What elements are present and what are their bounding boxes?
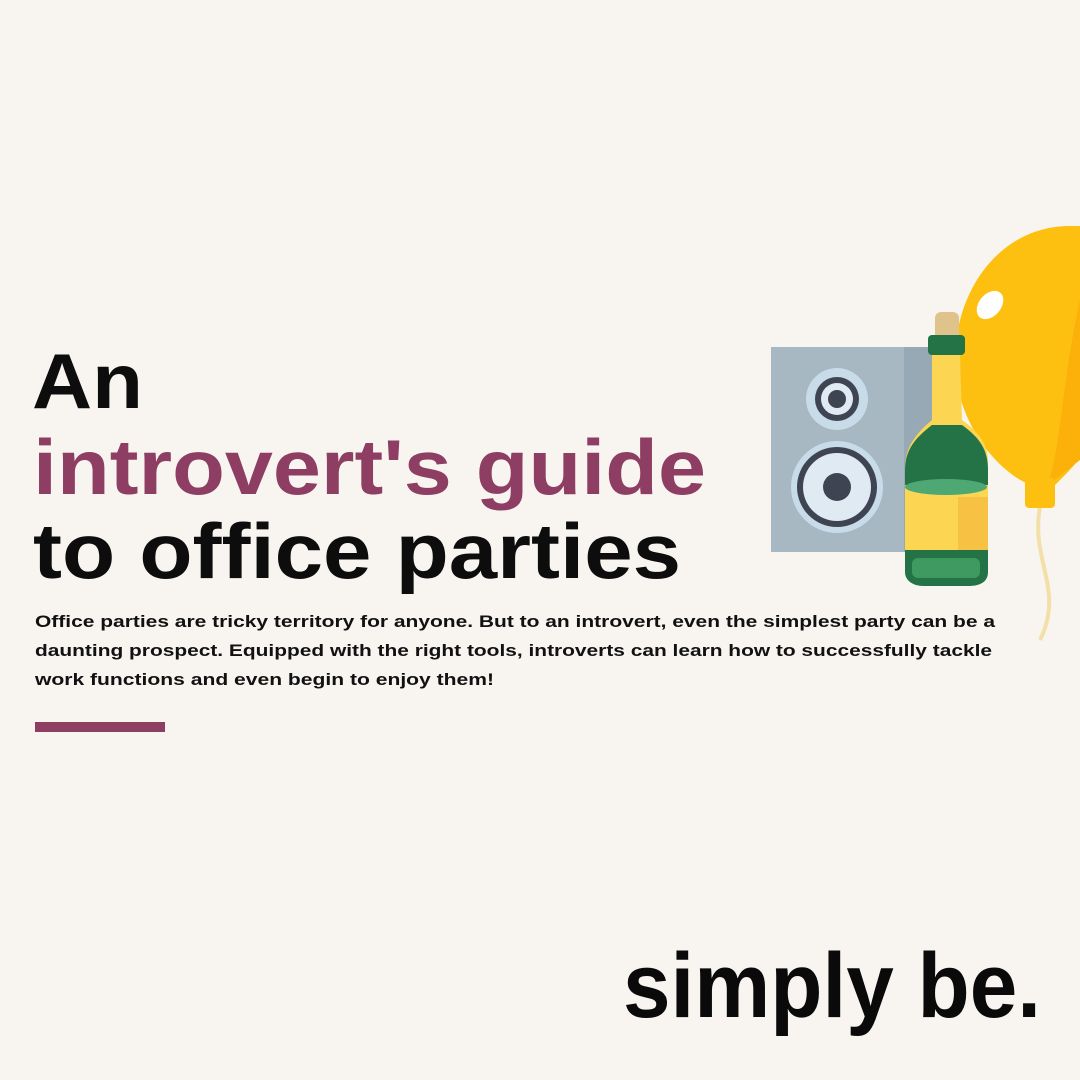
illustration: speaker [771, 347, 932, 552]
title: introvert's guide [33, 423, 706, 511]
accent bar [35, 722, 165, 732]
illustration: champagne bottle [905, 312, 988, 586]
title [32, 337, 706, 595]
title: to office parties [33, 507, 681, 595]
intro paragraph: work functions and even begin to enjoy them! [34, 670, 494, 689]
logo: simply be.: simply be. [623, 935, 1041, 1037]
intro paragraph [34, 612, 996, 689]
title: An [32, 337, 143, 425]
intro paragraph: Office parties are tricky territory for anyone. But to an introvert, even the simplest party can be a [35, 612, 996, 631]
intro paragraph: daunting prospect. Equipped with the right tools, introverts can learn how to successfully tackle [35, 641, 992, 660]
illustration: balloon [955, 226, 1080, 640]
